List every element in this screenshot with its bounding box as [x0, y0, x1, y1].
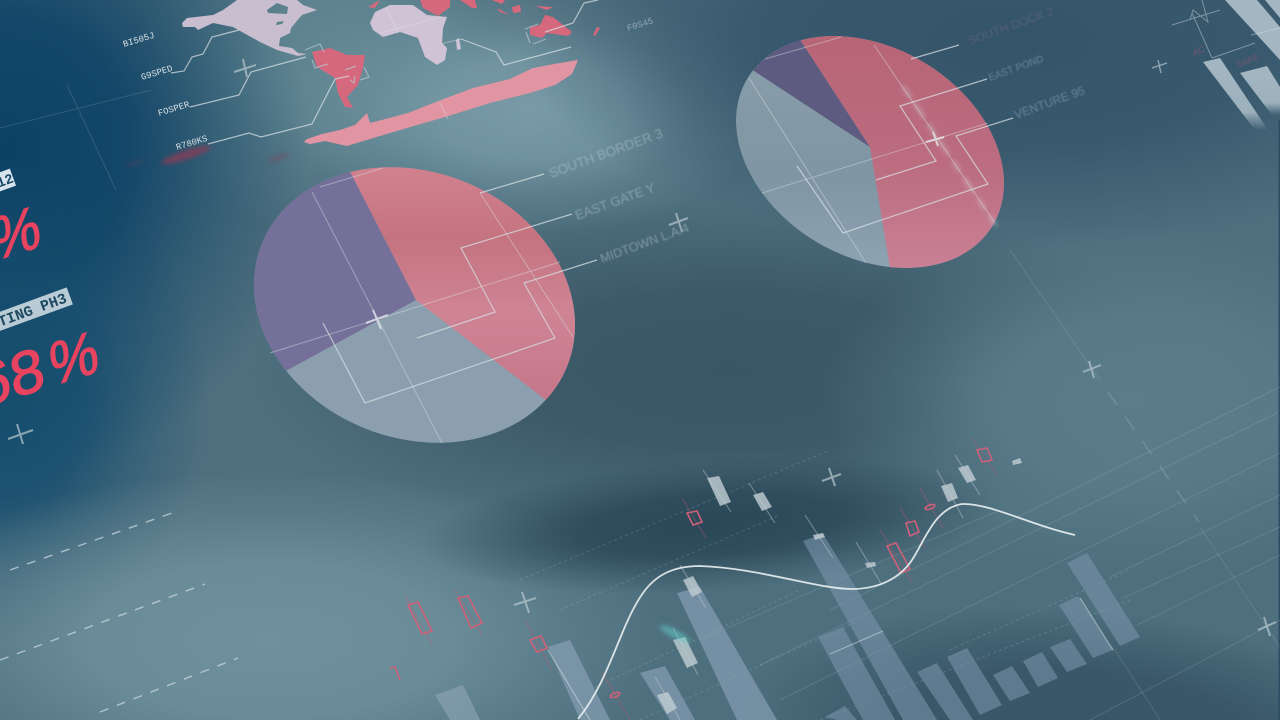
- blurred dark red marks: [125, 143, 290, 168]
- map labels: F0S45: [626, 16, 655, 34]
- faint red labels: SAFE: [1235, 52, 1261, 70]
- faint red labels: [1191, 44, 1261, 70]
- pie labels: MIDTOWN L.A.4: [598, 221, 691, 266]
- pie labels: SOUTH DOCK 2: [966, 4, 1056, 48]
- continent: Africa: [370, 5, 461, 65]
- map labels: FOSPER: [157, 100, 191, 119]
- pie labels: EAST POND: [987, 54, 1045, 84]
- map labels: R780KS: [175, 134, 209, 153]
- pie labels: EAST GATE Y: [573, 180, 657, 223]
- pie chart: small: [725, 4, 1087, 280]
- continent: North America: [182, 0, 317, 56]
- continent: Europe and Asia fragments: [368, 0, 553, 16]
- teal glow: [658, 622, 692, 646]
- map labels: BI505J: [122, 31, 156, 50]
- pie chart: large: [240, 126, 691, 450]
- left stats panel: [0, 169, 101, 422]
- continent: Antarctica: [304, 60, 578, 146]
- continent: Australia: [530, 15, 600, 38]
- bottom bar chart: [435, 534, 1140, 720]
- stat: percent sign two: %: [47, 318, 101, 399]
- blurred dashes: [903, 86, 996, 226]
- faint red labels: AC: [1191, 44, 1207, 58]
- continent: South America: [312, 48, 365, 108]
- grey candles: [657, 458, 1022, 714]
- dashed blurred guide: [1108, 392, 1199, 522]
- red candles: [390, 448, 992, 699]
- trend line: [578, 504, 1075, 719]
- crosshair: [926, 132, 944, 146]
- pie slices: [254, 167, 575, 443]
- cross markers: [8, 59, 1276, 636]
- map labels: [122, 16, 655, 153]
- pie wires: [749, 37, 995, 263]
- candlestick chart: [390, 438, 1075, 720]
- pie labels: [547, 126, 691, 266]
- map connector lines: [171, 0, 598, 144]
- map labels: G9SPED: [140, 64, 174, 83]
- world map: [122, 0, 655, 168]
- dashed lines: [0, 513, 238, 712]
- pie labels: [966, 4, 1087, 122]
- pie wires: [270, 168, 573, 443]
- grey candle wicks: [655, 455, 980, 720]
- pie labels: VENTURE 95: [1012, 83, 1087, 122]
- top right bar chart: [1172, 0, 1280, 130]
- pie labels: SOUTH BORDER 3: [547, 126, 665, 181]
- pie slices: [736, 36, 1004, 268]
- crosshair: [366, 310, 388, 329]
- red candle wicks: [405, 438, 998, 720]
